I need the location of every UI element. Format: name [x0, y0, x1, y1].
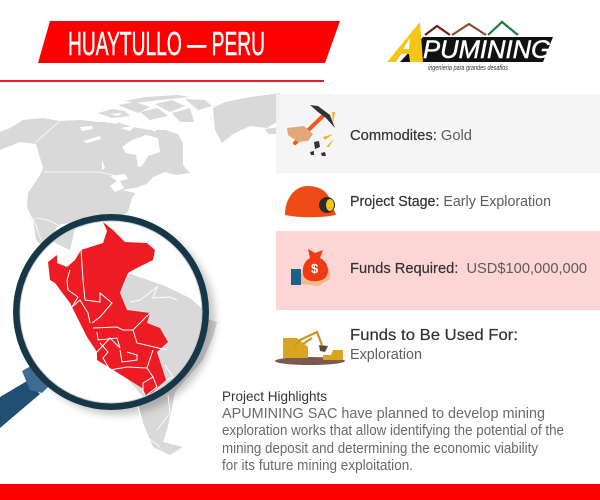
helmet lamp [319, 197, 335, 213]
excavator body [283, 338, 308, 358]
icon: money bag in hand [291, 249, 330, 286]
letter A [387, 22, 423, 62]
label: Funds to Be Used For: [350, 327, 518, 344]
Iceland fragment [265, 127, 280, 134]
text: funds to be used for [350, 327, 518, 363]
Mexico border [33, 217, 58, 240]
excavator boom [295, 332, 322, 345]
title banner [38, 21, 340, 63]
logo wordmark: PUMINING [423, 36, 551, 64]
green roof [488, 22, 518, 35]
Peru [48, 222, 168, 397]
Canadian small lakes [80, 126, 101, 143]
icon: miner helmet [285, 186, 336, 217]
dollar sign: $ [311, 261, 319, 276]
highlights line 3: mining deposit and determining the economic viability [222, 441, 539, 457]
highlights line 1: APUMINING SAC have planned to develop mining [222, 405, 545, 422]
handle [0, 381, 40, 428]
title underline [0, 80, 324, 82]
lamp lens [326, 199, 334, 211]
logo: Apumining [387, 22, 553, 72]
icon: excavator and truck [275, 332, 345, 365]
info panel: funds required background [276, 231, 600, 310]
highlights line 2: exploration works that allow identifying the potential of the [222, 423, 564, 439]
cuff [291, 269, 301, 285]
text: project stage: Project Stage: Early Exploration [350, 193, 551, 210]
footer bar [0, 484, 600, 500]
South America in lens [120, 273, 202, 396]
icon: hand with pick [287, 105, 335, 156]
highlights line 4: for its future mining exploitation. [222, 458, 413, 474]
second roof [452, 24, 486, 35]
North America mainland [0, 118, 190, 250]
banner shape [38, 21, 340, 63]
text: funds required: Funds Required: USD$100,000,000 [350, 260, 587, 277]
rocks [310, 141, 326, 156]
lens shadow [21, 221, 215, 415]
Arctic islands [98, 95, 212, 122]
info panel: commodities background [276, 94, 600, 173]
southern border lines [138, 395, 170, 447]
Central America [54, 229, 75, 250]
northern coast specks [104, 113, 182, 133]
lens rim [16, 218, 206, 406]
logo tagline: ingenieria para grandes desafios [428, 65, 508, 72]
Great Lakes [102, 160, 165, 193]
magnifying glass [0, 215, 215, 428]
lens contents [48, 222, 202, 396]
Canada and Alaska border lines [35, 119, 120, 177]
Hudson Bay [122, 135, 160, 167]
truck [323, 350, 343, 360]
sparks [323, 112, 335, 147]
highlights heading: Project Highlights [222, 388, 327, 404]
Greenland [213, 93, 280, 143]
value: Exploration [350, 346, 422, 363]
hand [301, 268, 330, 286]
brown mountain roofs [425, 26, 450, 35]
map details: bays, lakes and borders [35, 113, 182, 193]
text block: project highlights [222, 388, 564, 474]
pick handle [295, 114, 325, 143]
helmet shell [285, 186, 336, 217]
pick head [310, 105, 335, 128]
Peru region lines [67, 250, 167, 395]
title: HUAYTULLO — PERU [68, 25, 265, 62]
ground [275, 357, 345, 365]
text: commodities: Commodites: Gold [350, 127, 472, 144]
bucket [319, 345, 328, 352]
lens inner highlight [20, 221, 202, 403]
black band [400, 37, 553, 62]
map: North America and South America [0, 93, 280, 455]
collar [22, 366, 50, 393]
neighbouring country borders [130, 287, 177, 380]
arm [287, 126, 313, 142]
bag [303, 249, 328, 281]
South America outside lens [120, 275, 217, 455]
